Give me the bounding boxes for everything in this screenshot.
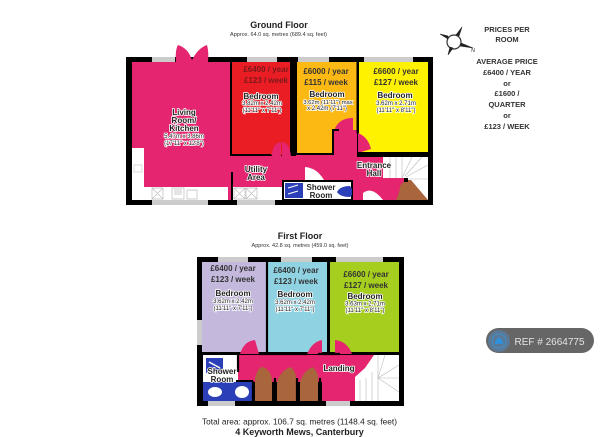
text: blue bedroom: 3.62m x 2.42m <box>275 300 315 306</box>
landing <box>236 355 374 401</box>
ground floor plan <box>126 45 433 205</box>
stairs first floor <box>353 355 399 401</box>
patio door swing <box>176 45 208 62</box>
prices per room text: ROOM <box>495 35 519 44</box>
shower room <box>282 180 353 200</box>
text: red bedroom: 3.82m x 2.42m <box>242 101 282 107</box>
windows first floor <box>197 257 383 406</box>
text: utility area: Area <box>247 173 265 182</box>
text: living room <box>164 108 204 147</box>
text: red bedroom: (11'11" x 7'11") <box>243 108 281 114</box>
text: yellow bedroom: £6600 / year <box>373 67 419 76</box>
bedroom yellow <box>359 62 428 153</box>
text: green bedroom: Bedroom <box>347 292 383 301</box>
ground floor heading: Ground Floor <box>250 20 308 30</box>
prices per room text: £123 / WEEK <box>484 122 530 131</box>
text: yellow bedroom: 3.62m x 2.71m <box>376 101 416 107</box>
outer walls first floor <box>197 257 404 406</box>
text: living room: 5.47m x 3.86m <box>164 134 204 140</box>
text: shower room: Room <box>310 191 332 200</box>
shower door <box>305 167 324 180</box>
text: orange bedroom: 3.62m (11'11") max <box>303 100 353 106</box>
bedroom red <box>232 62 290 155</box>
text: blue bedroom: (11'11" x 7'11") <box>276 307 314 313</box>
bedroom lilac <box>202 262 266 352</box>
text: green bedroom: £6600 / year <box>343 270 389 279</box>
entrance door <box>363 191 383 200</box>
text: utility area: Utility <box>245 165 268 174</box>
text: lilac bedroom: Bedroom <box>215 289 251 298</box>
text: entrance hall: Hall <box>367 169 381 178</box>
text: green bedroom: 3.63m x 2.71m <box>345 302 385 308</box>
first floor heading: First Floor <box>278 231 323 241</box>
text: yellow bedroom <box>373 67 419 114</box>
text: yellow bedroom: (11'11" x 8'11") <box>377 108 415 114</box>
bedroom orange <box>296 62 357 153</box>
text: utility area <box>245 165 268 182</box>
shower room first floor <box>203 355 253 401</box>
kitchen counters <box>132 148 228 200</box>
prices per room text: QUARTER <box>488 100 526 109</box>
text: blue bedroom: £6400 / year <box>273 266 319 275</box>
compass icon <box>440 27 475 55</box>
prices per room text: PRICES PER <box>484 25 530 34</box>
shower sink icon <box>337 186 352 197</box>
text: living room: (17'11" x 12'8") <box>164 141 204 147</box>
living room and hall <box>132 62 405 200</box>
brown cupboards <box>255 367 318 401</box>
text: orange bedroom <box>303 67 353 112</box>
text: lilac bedroom <box>210 264 256 312</box>
shower tray icon <box>285 183 303 198</box>
address: 4 Keyworth Mews, Canterbury <box>235 427 364 437</box>
text: lilac bedroom: £123 / week <box>211 275 256 284</box>
text: green bedroom: £127 / week <box>344 281 389 290</box>
text: blue bedroom <box>273 266 319 313</box>
text: first floor shower room: Shower <box>208 367 236 376</box>
text: entrance hall: Entrance <box>357 161 392 170</box>
text: shower room <box>307 183 335 200</box>
text: shower room: Shower <box>307 183 335 192</box>
prices per room text: or <box>503 111 511 120</box>
compass icon: N <box>471 48 475 54</box>
ref badge <box>486 328 594 353</box>
bedroom door swings <box>334 118 371 153</box>
landing door swings <box>240 340 352 354</box>
text: lilac bedroom: (11'11" x 7'11") <box>214 306 252 312</box>
text: lilac bedroom: £6400 / year <box>210 264 256 273</box>
bedroom green <box>330 262 399 352</box>
ref badge: REF # 2664775 <box>514 337 585 348</box>
utility counter <box>233 187 282 200</box>
text: first floor shower room: Room <box>211 375 233 384</box>
text: red bedroom <box>242 65 289 114</box>
text: orange bedroom: Bedroom <box>309 90 345 99</box>
text: first floor shower room <box>208 367 236 384</box>
windows ground floor <box>152 57 413 205</box>
text: landing: Landing <box>323 364 355 373</box>
text: orange bedroom: £6000 / year <box>303 67 349 76</box>
outer walls ground floor <box>126 57 433 205</box>
brown stair cupboard <box>396 180 428 200</box>
ground floor heading <box>230 20 327 38</box>
text: yellow bedroom: £127 / week <box>374 78 419 87</box>
text: lilac bedroom: 3.62m x 2.42m <box>213 299 253 305</box>
text: green bedroom <box>343 270 389 314</box>
text: blue bedroom: £123 / week <box>274 277 319 286</box>
text: living room: Room/ <box>172 116 197 125</box>
ground floor heading: Approx. 64.0 sq. metres (689.4 sq. feet) <box>230 32 327 38</box>
text: red bedroom: £6400 / year <box>243 65 289 74</box>
text: red bedroom: Bedroom <box>243 92 279 101</box>
internal walls <box>231 62 428 200</box>
text: orange bedroom: £115 / week <box>304 78 348 87</box>
red bedroom door <box>272 142 291 157</box>
prices per room text: £6400 / YEAR <box>483 68 531 77</box>
prices per room text: or <box>503 79 511 88</box>
text: entrance hall <box>357 161 392 178</box>
prices per room text: £1600 / <box>494 89 520 98</box>
text: red bedroom: £123 / week <box>244 76 289 85</box>
first floor plan <box>197 257 404 406</box>
text: yellow bedroom: Bedroom <box>377 91 413 100</box>
internal walls first floor <box>202 262 399 401</box>
prices per room text: AVERAGE PRICE <box>476 57 538 66</box>
stairs <box>383 157 428 200</box>
text: green bedroom: (11'11" x 8'11") <box>346 308 384 314</box>
text: living room: Kitchen <box>169 124 199 133</box>
text: orange bedroom: x 2.42m (7'11") <box>307 106 347 112</box>
prices per room text <box>476 25 538 131</box>
bedroom blue <box>268 262 327 352</box>
first floor heading <box>252 231 349 249</box>
first floor heading: Approx. 42.8 sq. metres (459.0 sq. feet) <box>252 243 349 249</box>
total area text: Total area: approx. 106.7 sq. metres (1148.4 sq. feet) <box>202 416 397 426</box>
text: living room: Living <box>172 108 196 117</box>
text: blue bedroom: Bedroom <box>277 290 313 299</box>
